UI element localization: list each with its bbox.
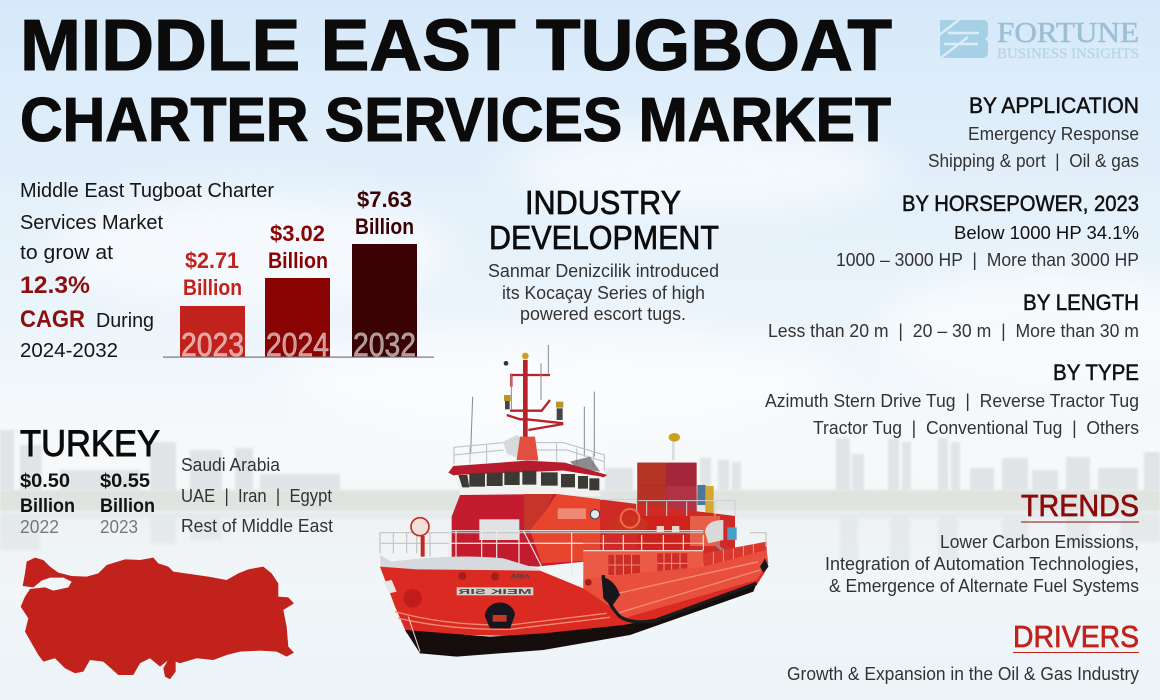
bar 2024: $3.02 — [270, 221, 325, 246]
rails — [380, 533, 766, 557]
panel: CAGR statement: 2024-2032 — [20, 340, 118, 362]
panel: CAGR statement: 12.3% — [20, 272, 90, 299]
main deck structures — [583, 551, 703, 588]
bar 2024 — [265, 221, 330, 363]
bar 2024: Billion — [268, 248, 328, 273]
mid deck — [600, 499, 735, 580]
panel: by type: Tractor Tug | Conventional Tug | Others — [813, 418, 1139, 438]
bar 2024: 2024 — [266, 326, 329, 363]
panel: by type: BY TYPE — [1053, 360, 1139, 385]
panel: by type — [765, 360, 1139, 438]
panel: by length: BY LENGTH — [1023, 290, 1139, 315]
map: Turkey — [21, 558, 294, 679]
panel: CAGR statement: to grow at — [20, 242, 113, 264]
title: CHARTER SERVICES MARKET — [20, 86, 891, 155]
panel: CAGR statement: Middle East Tugboat Charter — [20, 180, 274, 202]
icon: FB logo mark — [938, 19, 988, 60]
panel: Turkey: $0.55 — [100, 471, 150, 492]
panel: by type: Azimuth Stern Drive Tug | Reverse Tractor Tug — [765, 391, 1139, 411]
panel: Turkey: Billion — [20, 496, 75, 517]
bar 2023: 2023 — [181, 326, 244, 363]
panel: CAGR statement: Services Market — [20, 212, 163, 234]
hull black waterline — [405, 583, 757, 657]
bar 2023 — [180, 248, 245, 363]
panel: Turkey: Billion — [100, 496, 155, 517]
mast and antennas — [471, 345, 594, 460]
bar 2032: Billion — [355, 214, 414, 239]
panel: CAGR statement: CAGR — [20, 306, 85, 333]
panel: by application: Shipping & port | Oil & gas — [928, 151, 1139, 171]
logo: Fortune Business Insights: BUSINESS INSIGHTS — [997, 46, 1139, 62]
panel: Turkey: Rest of Middle East — [181, 516, 333, 536]
bar 2032: $7.63 — [357, 187, 412, 212]
panel: by length — [768, 290, 1139, 341]
foredeck — [380, 555, 542, 571]
logo: Fortune Business Insights — [938, 18, 1139, 62]
panel: industry development: INDUSTRY — [525, 184, 681, 221]
panel: drivers: Growth & Expansion in the Oil & Gas Industry — [787, 664, 1139, 684]
panel: trends — [825, 488, 1139, 596]
panel: Turkey: Saudi Arabia — [181, 455, 281, 475]
panel: trends: TRENDS — [1021, 488, 1139, 523]
panel: CAGR statement: During — [96, 310, 154, 332]
bar 2032: 2032 — [353, 326, 416, 363]
logo: Fortune Business Insights: FORTUNE — [997, 18, 1139, 49]
panel: by application — [928, 93, 1139, 171]
panel: trends: Lower Carbon Emissions, — [940, 532, 1139, 552]
panel: CAGR statement — [20, 180, 274, 362]
panel: industry development: its Kocaçay Series of high — [502, 283, 705, 303]
superstructure — [452, 494, 600, 567]
panel: by application: BY APPLICATION — [969, 93, 1139, 118]
panel: by horsepower: BY HORSEPOWER, 2023 — [902, 191, 1139, 216]
illustration: red tugboat — [380, 345, 768, 657]
title — [20, 6, 892, 155]
containers — [637, 463, 697, 518]
illustration: red tugboat: AIBA — [510, 575, 530, 581]
panel: Turkey — [20, 423, 333, 537]
panel: by application: Emergency Response — [968, 124, 1139, 144]
panel: industry development — [488, 184, 719, 324]
panel: industry development: powered escort tugs. — [520, 304, 686, 324]
panel: trends: Integration of Automation Technologies, — [825, 554, 1139, 574]
panel: Turkey: 2022 — [20, 517, 59, 537]
panel: by horsepower: 1000 – 3000 HP | More than 3000 HP — [836, 250, 1139, 270]
panel: Turkey: 2023 — [100, 517, 138, 537]
bar 2023: Billion — [183, 275, 242, 300]
panel: Turkey: $0.50 — [20, 471, 70, 492]
title: MIDDLE EAST TUGBOAT — [20, 6, 892, 86]
bar chart: market size — [163, 187, 434, 363]
illustration: red tugboat: MEIK SIR — [458, 589, 532, 596]
panel: drivers: DRIVERS — [1013, 619, 1139, 654]
panel: by horsepower: Below 1000 HP 34.1% — [954, 223, 1139, 243]
panel: Turkey: TURKEY — [20, 423, 160, 464]
hull — [380, 553, 768, 637]
panel: drivers — [787, 619, 1139, 684]
bar 2032 — [352, 187, 417, 363]
bar 2023: $2.71 — [185, 248, 239, 273]
panel: Turkey: UAE | Iran | Egypt — [181, 486, 332, 506]
panel: by horsepower — [836, 191, 1139, 270]
panel: trends: & Emergence of Alternate Fuel Systems — [829, 576, 1139, 596]
panel: industry development: Sanmar Denizcilik introduced — [488, 261, 719, 281]
panel: industry development: DEVELOPMENT — [489, 219, 719, 256]
panel: by length: Less than 20 m | 20 – 30 m | More than 30 m — [768, 321, 1139, 341]
wheelhouse — [448, 461, 607, 477]
upper deck rails — [454, 443, 604, 471]
